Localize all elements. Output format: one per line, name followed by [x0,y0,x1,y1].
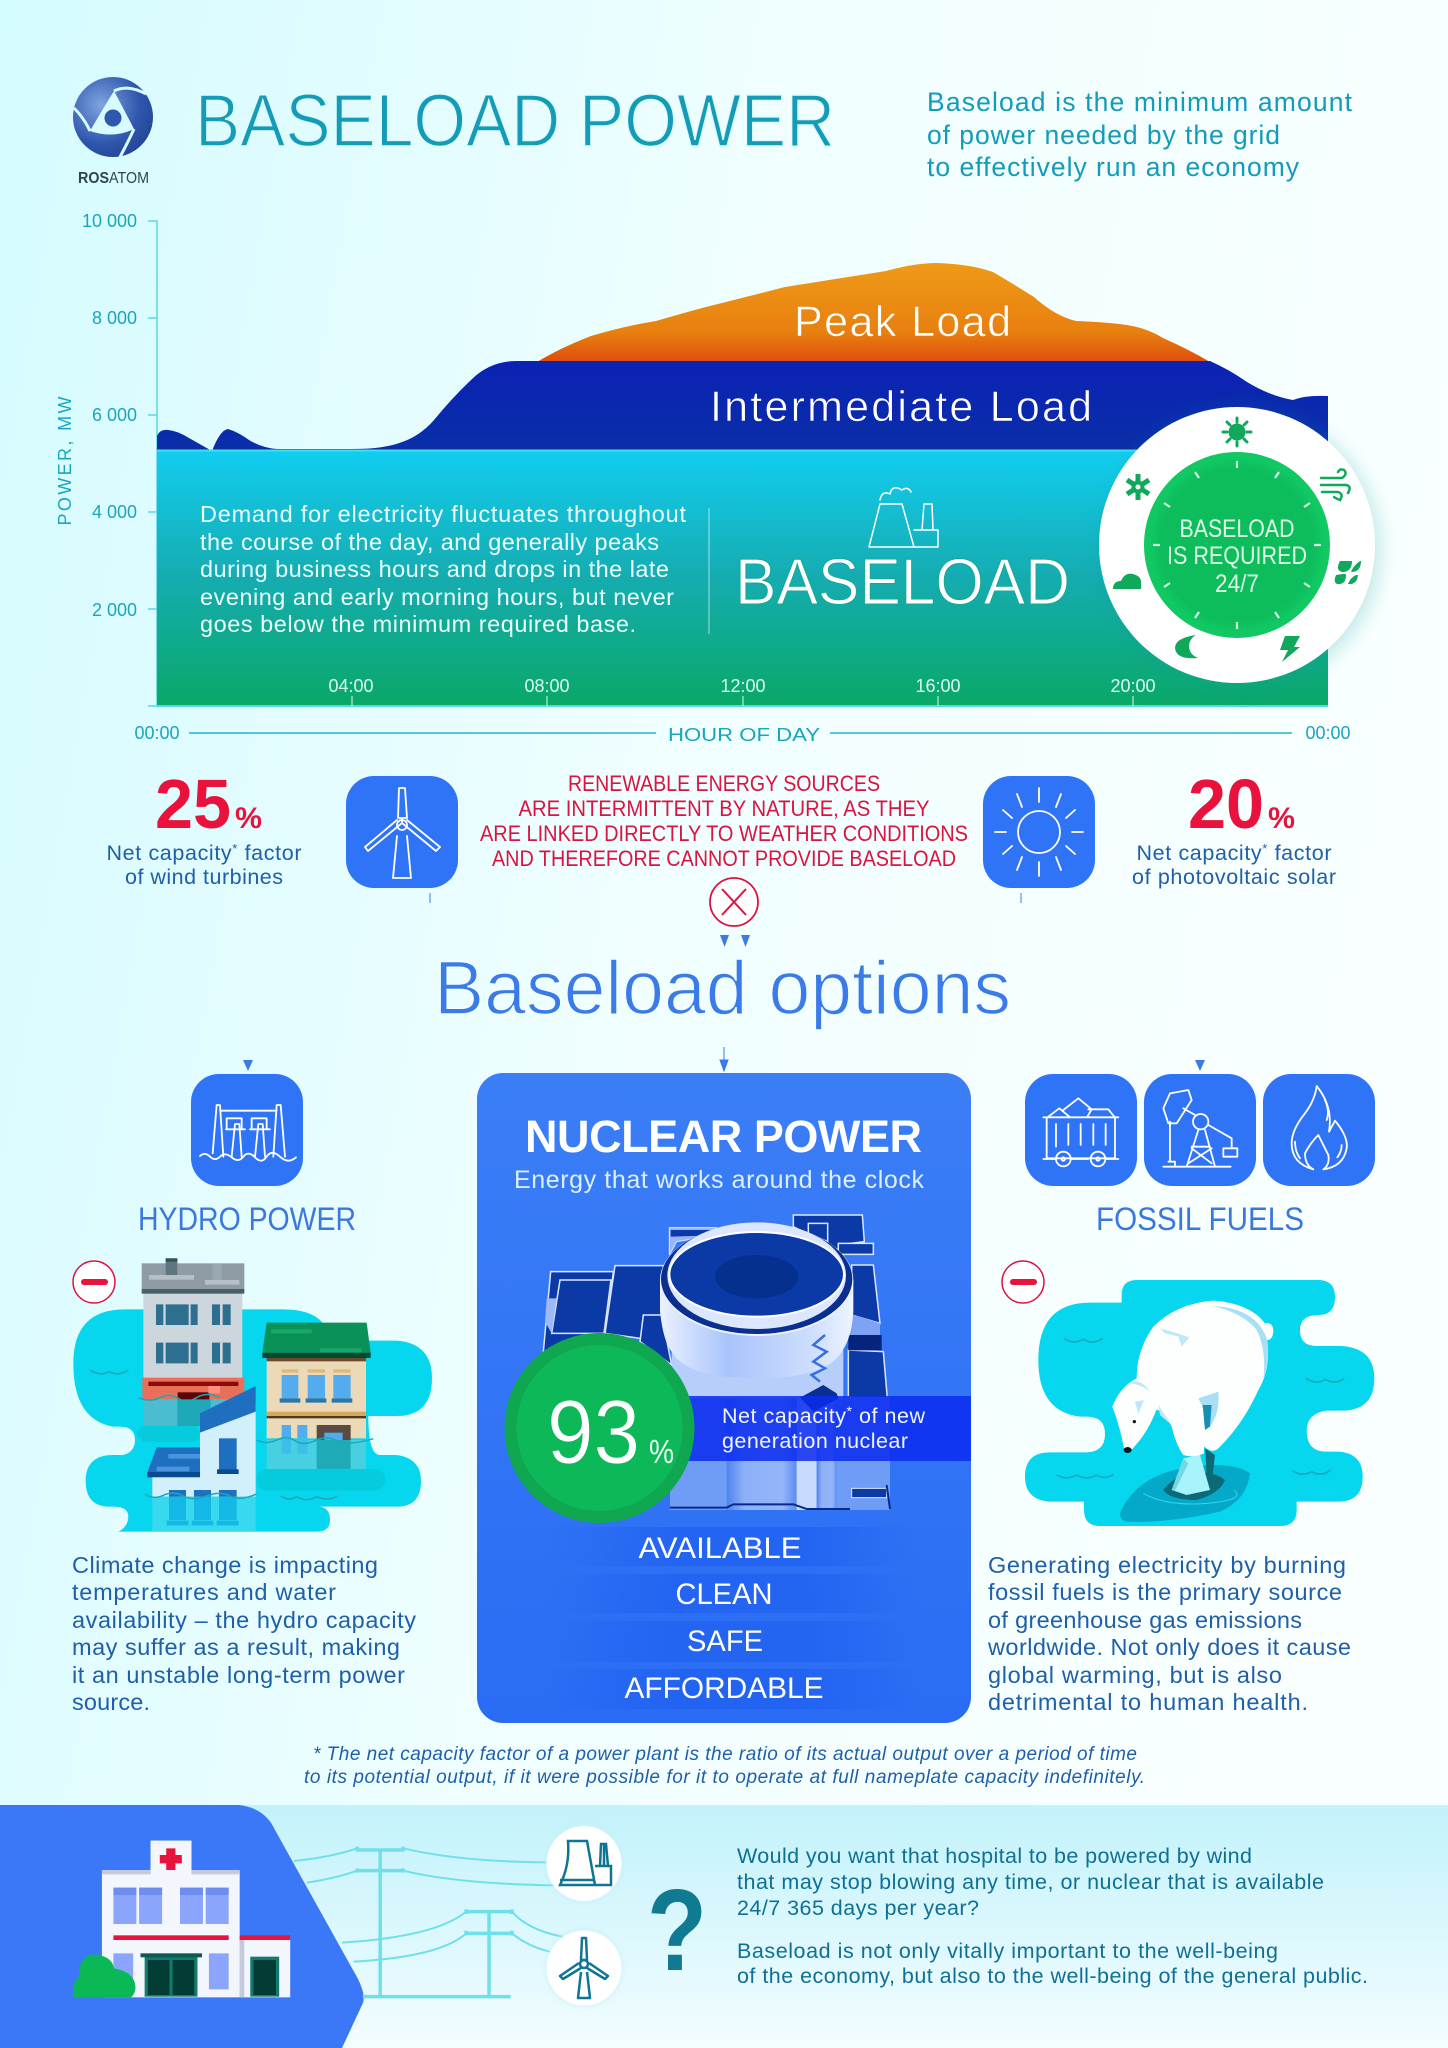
list: qualities: AVAILABLE [638,1532,802,1565]
arrow: hydro [243,1060,253,1071]
icon: power plant [869,488,938,547]
text: fossil: of greenhouse gas emissions [988,1607,1302,1633]
text: fossil: Generating electricity by burning [988,1552,1346,1578]
x axis title [134,723,1351,745]
illustration: flooded houses [73,1258,432,1532]
x axis hours: 12:00 [720,676,766,696]
panel: nuclear power [477,1073,971,1723]
closing question text: Baseload is not only vitally important to the well-being [737,1939,1278,1963]
label: baseload: BASELOAD [735,545,1070,618]
label: intermediate load: Intermediate Load [710,383,1092,431]
arrows to options [720,935,750,947]
dial: baseload is required 24/7: 24/7 [1215,570,1259,598]
text: fossil: detrimental to human health. [988,1689,1308,1715]
demand description: evening and early morning hours, but never [200,584,674,610]
closing question text: of the economy, but also to the well-being of the general public. [737,1964,1368,1988]
stat: solar 20%: of photovoltaic solar [1132,865,1336,889]
x axis hours [328,676,1156,706]
warning text: renewables: RENEWABLE ENERGY SOURCES [568,771,880,796]
stat: wind 25%: of wind turbines [125,865,283,889]
list: qualities: AFFORDABLE [624,1672,824,1705]
x axis hours: 08:00 [524,676,570,696]
icon: cloud [1113,574,1141,589]
heading: FOSSIL FUELS [1096,1201,1304,1237]
y axis: 6 000 [92,405,137,425]
text: fossil: worldwide. Not only does it cause [987,1634,1351,1660]
illustration: reactor [543,1215,890,1510]
closing question text: Would you want that hospital to be powered by wind [737,1844,1252,1868]
icon: oil pump [1144,1074,1256,1186]
stat: solar 20%: * [1262,841,1267,856]
heading: HYDRO POWER [138,1201,356,1237]
x axis hours: 16:00 [915,676,961,696]
list: qualities: CLEAN [676,1578,772,1611]
warning text: renewables: ARE INTERMITTENT BY NATURE, AS THEY [518,796,930,821]
grey building [142,1258,244,1426]
icon: minus [73,1261,115,1303]
text: hydro: source. [72,1689,150,1715]
stat: solar 20%: 20 [1188,765,1264,843]
x axis title: 00:00 [1305,723,1351,743]
dial: baseload is required 24/7: IS REQUIRED [1167,542,1307,570]
list: qualities: SAFE [687,1625,763,1658]
dial: baseload is required 24/7: BASELOAD [1180,515,1294,543]
icon: wind turbine box [346,776,458,903]
closing question text [737,1844,1368,1988]
demand description: the course of the day, and generally peaks [200,529,659,555]
stat: wind 25%: Net capacity [106,841,232,865]
area: intermediate load [157,361,1328,452]
icon: wind turbine circle [545,1929,623,2007]
warning text: renewables [480,771,968,871]
dial: baseload is required 24/7 [1099,407,1381,689]
icon: snowflake [1127,474,1149,500]
text: hydro: it an unstable long-term power [72,1662,405,1688]
area: baseload [157,450,1328,706]
panel: hydro power [72,1074,432,1715]
text: hydro: may suffer as a result, making [72,1634,400,1660]
icon: lightning [1280,636,1300,662]
chart: daily load curve [55,211,1351,745]
panel: fossil fuels [987,1074,1375,1715]
footnote: to its potential output, if it were possible for it to operate at full nameplate capacity indefinitely. [304,1767,1145,1788]
intro text: Baseload is the minimum amount [927,87,1353,117]
arrow: nuclear [720,1047,728,1071]
intro text [927,87,1353,182]
logo: Rosatom: ROSATOM [78,170,149,187]
intro text: to effectively run an economy [927,152,1300,182]
x axis title: 00:00 [134,723,180,743]
icon: dam [191,1074,303,1186]
illustration: power lines [294,1847,562,1997]
intro text: of power needed by the grid [927,120,1280,150]
icon: coal wagon [1025,1074,1137,1186]
icon: rain drops [1335,561,1361,584]
heading: baseload options: Baseload options [434,946,1011,1031]
demand description: Demand for electricity fluctuates throughout [200,501,686,527]
y axis: 4 000 [92,502,137,522]
icon: moon [1175,635,1198,658]
blue shape [0,1805,364,2048]
stat: solar 20%: factor [1268,841,1332,865]
stat: solar 20% [1132,765,1336,889]
demand description: goes below the minimum required base. [200,611,636,637]
band: net capacity: of new [853,1404,925,1428]
stat: 93% [504,1333,694,1523]
beige house [262,1323,371,1469]
subheading: Energy that works around the clock [514,1166,924,1194]
stat: wind 25%: % [235,802,262,835]
stat: wind 25%: * [232,841,237,856]
icon: wind [1321,469,1350,500]
demand description [200,501,686,637]
bottom band [0,1805,1448,2048]
illustration: polar bear on ice [1025,1280,1374,1526]
text: hydro: availability – the hydro capacity [72,1607,416,1633]
text: fossil: global warming, but is also [988,1662,1282,1688]
warning text: renewables: ARE LINKED DIRECTLY TO WEATHER CONDITIONS [480,821,968,846]
label: peak load: Peak Load [794,298,1011,346]
y axis: POWER, MW [55,396,75,526]
logo: Rosatom [73,77,153,187]
closing question text: that may stop blowing any time, or nuclear that is available [737,1870,1324,1894]
stat: wind 25% [106,765,302,889]
white house [147,1386,256,1532]
stat: 93%: % [649,1433,674,1470]
text: hydro: Climate change is impacting [72,1552,378,1578]
heading: NUCLEAR POWER [525,1111,922,1162]
title: BASELOAD POWER [195,79,835,162]
stat: solar 20%: % [1268,802,1295,835]
stat: wind 25%: factor [238,841,302,865]
demand description: during business hours and drops in the late [200,556,669,582]
closing question text: 24/7 365 days per year? [737,1896,979,1920]
icon: sun box [983,776,1095,903]
stat: wind 25%: 25 [155,765,231,843]
band: net capacity [687,1396,971,1461]
text: hydro: temperatures and water [72,1579,336,1605]
text: hydro [72,1552,416,1715]
text: fossil [987,1552,1351,1715]
footnote [304,1744,1145,1788]
band: net capacity: * [847,1403,853,1419]
icon: gas flame [1263,1074,1375,1186]
y axis [55,211,157,706]
icon: minus [1002,1261,1044,1303]
icon: power plant circle [545,1824,623,1902]
icon: question mark: ? [647,1865,707,1995]
band: net capacity: generation nuclear [722,1429,908,1453]
x axis hours: 20:00 [1110,676,1156,696]
text: fossil: fossil fuels is the primary source [988,1579,1342,1605]
footnote: * The net capacity factor of a power plant is the ratio of its actual output over a period of time [313,1744,1137,1765]
icon: cross [710,878,758,926]
band: net capacity: Net capacity [722,1404,846,1428]
x axis hours: 04:00 [328,676,374,696]
y axis: 2 000 [92,600,137,620]
area: peak load [537,263,1210,362]
illustration: hospital [73,1841,290,1997]
stat: solar 20%: Net capacity [1136,841,1262,865]
y axis: 10 000 [82,211,137,231]
icon: sun [1223,418,1251,446]
warning text: renewables: AND THEREFORE CANNOT PROVIDE BASELOAD [492,846,956,871]
list: qualities [547,1527,917,1709]
x axis title: HOUR OF DAY [668,725,820,745]
stat: 93%: 93 [547,1383,640,1483]
arrow: fossil [1195,1060,1205,1071]
y axis: 8 000 [92,308,137,328]
